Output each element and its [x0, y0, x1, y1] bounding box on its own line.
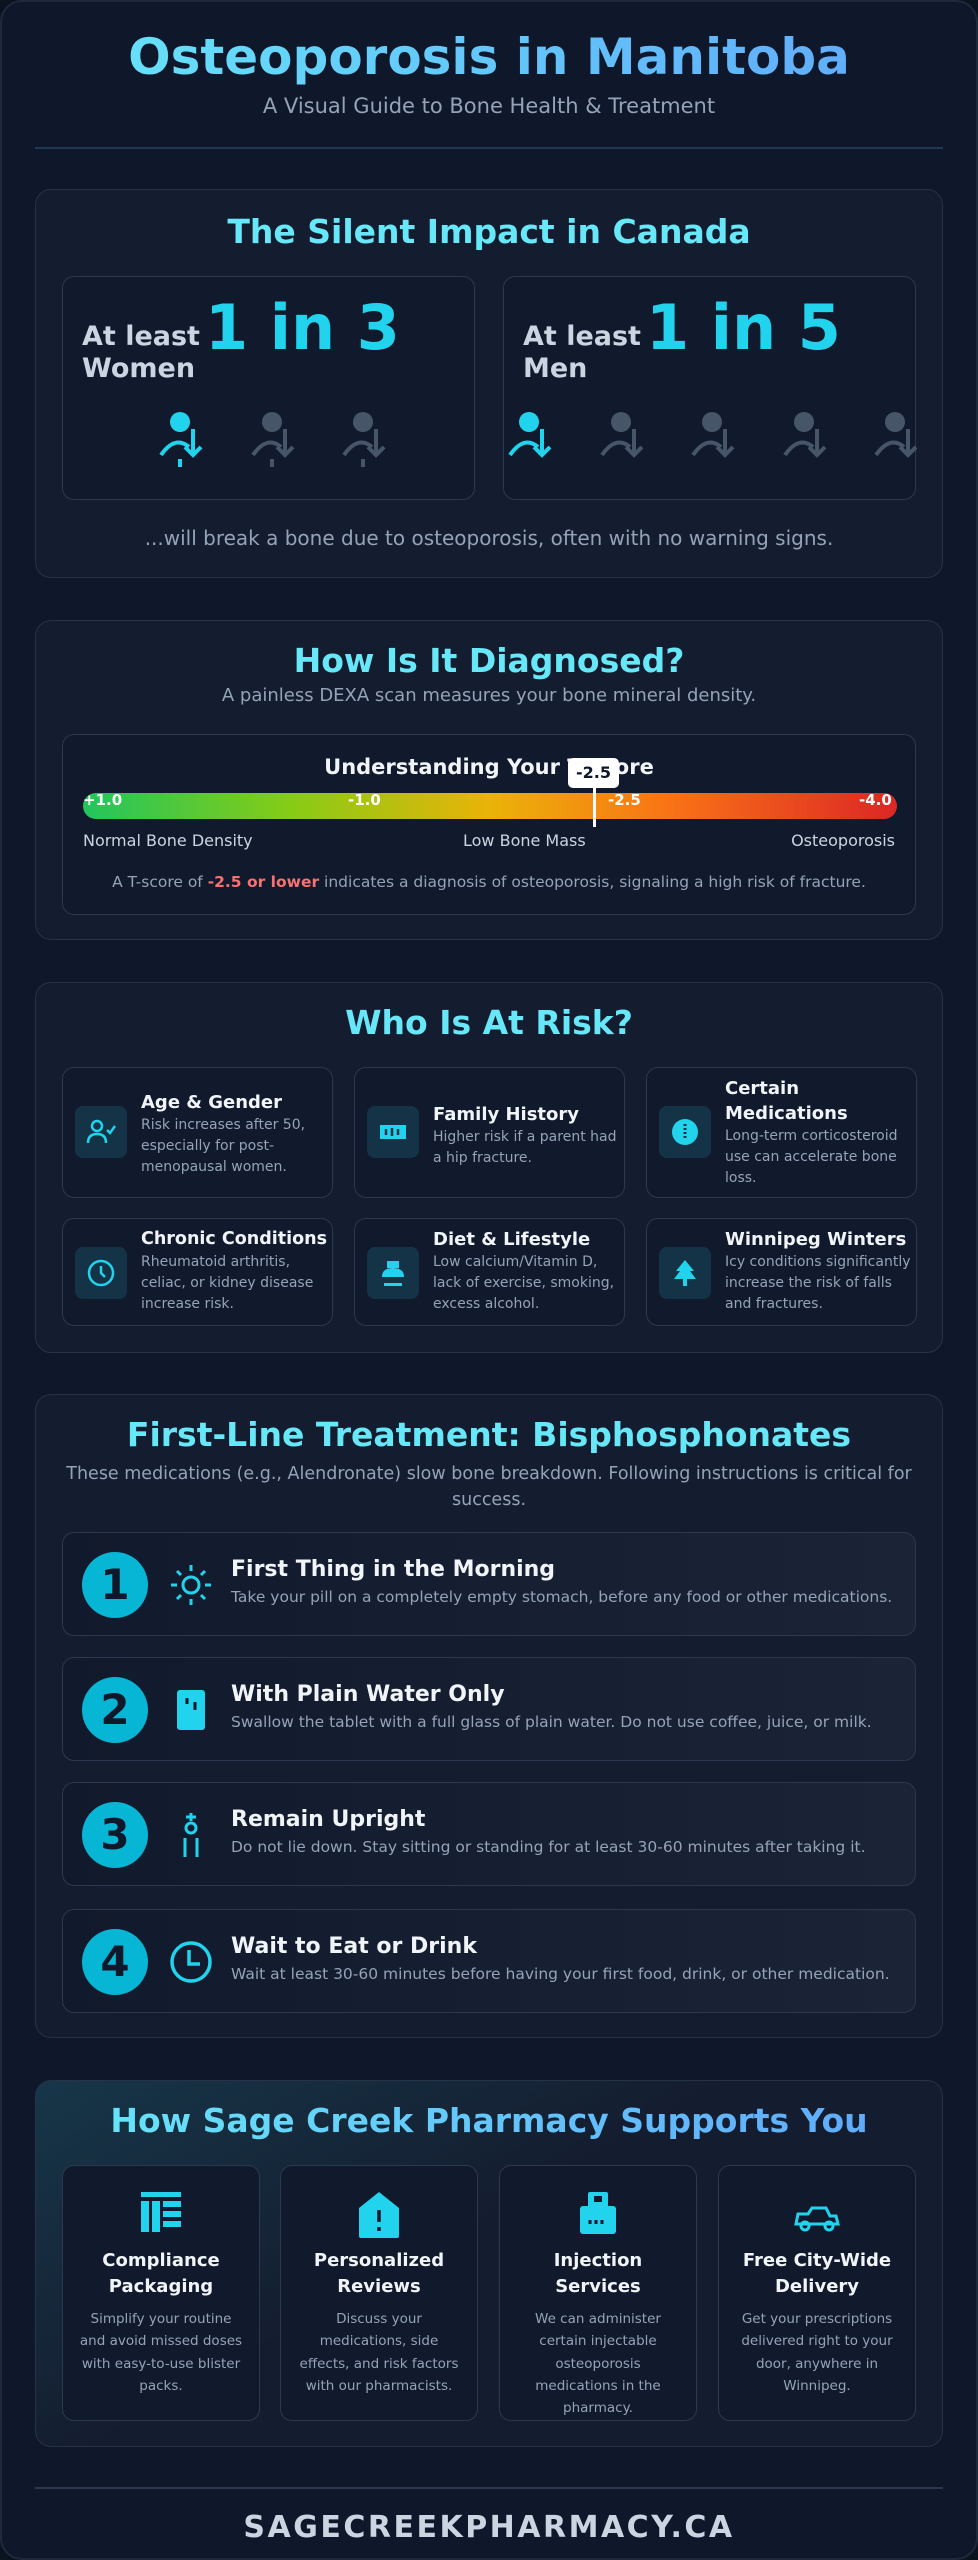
service: injection	[499, 2165, 697, 2421]
panel: pharmacy support	[35, 2080, 943, 2447]
risk card: diet: Low calcium/Vitamin D, lack of exercise, smoking, excess alcohol.	[433, 1254, 614, 1312]
stat card: women	[62, 276, 475, 500]
risk card: diet: Diet & Lifestyle	[433, 1229, 590, 1250]
T-score chart: -1.0	[348, 791, 381, 809]
service: compliance packaging	[62, 2165, 260, 2421]
service: delivery: Get your prescriptions delivered right to your door, anywhere in Winnipeg.	[741, 2311, 893, 2394]
service: compliance packaging: Compliance Packaging	[102, 2250, 220, 2297]
risk card: family: Family History	[433, 1104, 579, 1125]
service: reviews: Discuss your medications, side effects, and risk factors with our pharmacists.	[300, 2311, 458, 2394]
service: injection: Injection Services	[554, 2250, 642, 2297]
risk card: winters	[646, 1218, 917, 1326]
title	[0, 24, 978, 90]
service: reviews: Personalized Reviews	[314, 2250, 444, 2297]
service: delivery: Free City-Wide Delivery	[743, 2250, 891, 2297]
step 2	[62, 1657, 916, 1761]
subtitle: DEXA: A painless DEXA scan measures your bone mineral density.	[222, 685, 756, 706]
risk card: age	[62, 1067, 333, 1198]
footer: website: SAGECREEKPHARMACY.CA	[243, 2510, 735, 2545]
risk card: age: Risk increases after 50, especially for post-menopausal women.	[141, 1117, 305, 1175]
subtitle: A Visual Guide to Bone Health & Treatment	[263, 94, 715, 118]
T-score chart: +1.0	[83, 791, 122, 809]
title: Osteoporosis in Manitoba	[128, 28, 850, 86]
stat card: women: At least	[82, 321, 200, 352]
service: reviews	[280, 2165, 478, 2421]
risk card: medications: Medications	[725, 1103, 848, 1124]
step 3: Do not lie down. Stay sitting or standing for at least 30-60 minutes after taking it.	[231, 1838, 866, 1856]
service: injection: We can administer certain injectable osteoporosis medications in the pharmacy.	[535, 2311, 661, 2416]
heading: risk: Who Is At Risk?	[345, 1003, 633, 1042]
panel: treatment	[35, 1394, 943, 2038]
step 1: Take your pill on a completely empty stomach, before any food or other medications.	[231, 1588, 892, 1606]
T-score chart: -4.0	[859, 791, 892, 809]
risk card: chronic	[62, 1218, 333, 1326]
step 4: 4	[100, 1937, 130, 1986]
step 2: Swallow the tablet with a full glass of plain water. Do not use coffee, juice, or milk.	[231, 1713, 872, 1731]
risk card: family	[354, 1067, 625, 1198]
step 3: Remain Upright	[231, 1807, 425, 1832]
risk card: winters: Winnipeg Winters	[725, 1229, 906, 1250]
step 4	[62, 1909, 916, 2013]
T-score chart: Osteoporosis	[791, 831, 895, 850]
step 3: 3	[100, 1810, 130, 1859]
T-score chart: -2.5	[608, 791, 641, 809]
stat card: women: Women	[82, 353, 195, 384]
T-score chart: -2.5	[576, 763, 611, 782]
step 3	[62, 1782, 916, 1886]
T-score chart	[62, 734, 916, 915]
subtitle: treatment: These medications (e.g., Alendronate) slow bone breakdown. Following instructions is critical for success.	[66, 1464, 912, 1510]
stat card: men	[503, 276, 916, 500]
stat card: men: 1 in 5	[646, 291, 841, 364]
step 4: Wait to Eat or Drink	[231, 1934, 477, 1959]
risk card: medications	[646, 1067, 917, 1198]
step 4: Wait at least 30-60 minutes before having your first food, drink, or other medication.	[231, 1965, 890, 1983]
heading: diagnosis: How Is It Diagnosed?	[294, 641, 684, 680]
stat card: men: At least	[523, 321, 641, 352]
T-score chart: A T-score of -2.5 or lower indicates a diagnosis of osteoporosis, signaling a high risk of fracture.	[112, 873, 866, 891]
stat card: women: 1 in 3	[205, 291, 400, 364]
icons: men	[508, 412, 917, 458]
caption: ...will break a bone due to osteoporosis, often with no warning signs.	[145, 526, 833, 550]
risk card: medications: Certain	[725, 1078, 799, 1099]
risk card: diet	[354, 1218, 625, 1326]
step 2: With Plain Water Only	[231, 1682, 505, 1707]
service: compliance packaging: Simplify your routine and avoid missed doses with easy-to-use blister packs.	[80, 2311, 242, 2394]
panel: silent impact	[35, 189, 943, 578]
step 1	[62, 1532, 916, 1636]
risk card: medications: Long-term corticosteroid use can accelerate bone loss.	[725, 1128, 897, 1186]
icons: women	[159, 412, 386, 467]
heading: silent impact: The Silent Impact in Canada	[227, 212, 751, 251]
stat card: men: Men	[523, 353, 587, 384]
panel: risk	[35, 982, 943, 1353]
T-score chart: Low Bone Mass	[463, 831, 586, 850]
heading: pharmacy: How Sage Creek Pharmacy Supports You	[110, 2101, 868, 2140]
panel: diagnosis	[35, 620, 943, 940]
risk card: chronic: Rheumatoid arthritis, celiac, or kidney disease increase risk.	[141, 1254, 313, 1312]
heading: treatment: First-Line Treatment: Bisphosphonates	[127, 1415, 851, 1454]
risk card: family: Higher risk if a parent had a hip fracture.	[433, 1129, 616, 1166]
step 1: 1	[100, 1560, 130, 1609]
step 1: First Thing in the Morning	[231, 1557, 555, 1582]
risk card: winters: Icy conditions significantly increase the risk of falls and fractures.	[725, 1254, 910, 1312]
T-score chart: Understanding Your T-Score	[324, 755, 654, 779]
risk card: chronic: Chronic Conditions	[141, 1229, 327, 1249]
T-score chart: Normal Bone Density	[83, 831, 253, 850]
step 2: 2	[100, 1685, 130, 1734]
service: delivery	[718, 2165, 916, 2421]
risk card: age: Age & Gender	[141, 1092, 282, 1113]
